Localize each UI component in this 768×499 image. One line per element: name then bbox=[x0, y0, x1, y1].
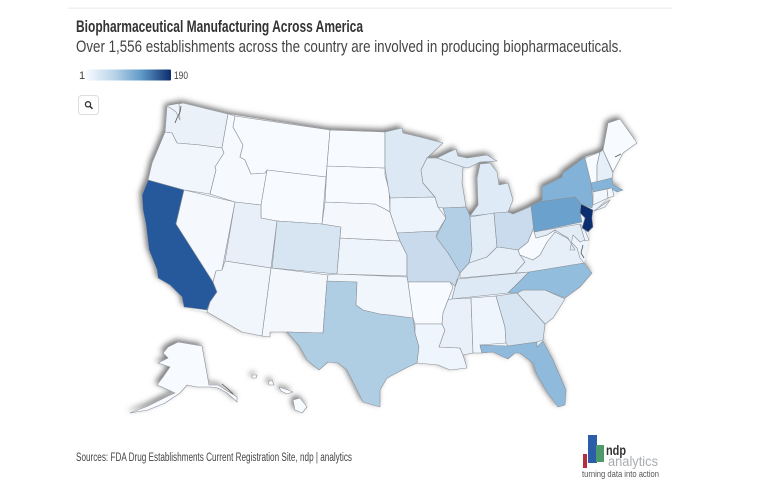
state: Florida bbox=[480, 341, 566, 407]
logo: ndp analytics: ndp bbox=[606, 442, 626, 458]
state: Indiana bbox=[469, 213, 497, 263]
state: Idaho bbox=[210, 114, 267, 205]
choropleth map of US states bbox=[130, 103, 637, 413]
state: Oklahoma bbox=[327, 274, 413, 318]
state: Massachusetts bbox=[591, 178, 623, 192]
state: Arizona bbox=[207, 261, 271, 336]
state: Mississippi bbox=[439, 298, 473, 355]
state: South Carolina bbox=[517, 290, 565, 324]
colour scale legend: 1 bbox=[79, 70, 85, 82]
state: North Carolina bbox=[508, 263, 592, 298]
state: Georgia bbox=[496, 293, 545, 346]
state: California bbox=[142, 180, 217, 310]
colour scale legend bbox=[79, 70, 188, 82]
state: Vermont bbox=[585, 152, 600, 183]
state: Utah bbox=[225, 202, 277, 268]
state: Alaska bbox=[130, 342, 237, 413]
state: Montana bbox=[233, 116, 330, 177]
state: Minnesota bbox=[385, 128, 443, 198]
state: Colorado bbox=[272, 221, 341, 274]
logo: ndp analytics bbox=[582, 435, 659, 480]
logo: ndp analytics: analytics bbox=[608, 453, 658, 469]
state: Oregon bbox=[148, 132, 224, 194]
state: Kansas bbox=[337, 238, 407, 276]
state: Kentucky bbox=[460, 247, 525, 278]
state: West Virginia bbox=[518, 227, 555, 260]
state: Arkansas bbox=[408, 282, 453, 324]
subtitle: Over 1,556 establishments across the country are involved in producing biopharmaceuticals. bbox=[76, 37, 622, 56]
state: Kauai bbox=[252, 375, 257, 378]
state: Wisconsin bbox=[421, 158, 466, 208]
state: Pennsylvania bbox=[531, 197, 582, 232]
source note: Sources: FDA Drug Establishments Current Registration Site, ndp | analytics bbox=[76, 452, 352, 464]
state: Washington bbox=[165, 103, 228, 148]
contiguous US silhouette underlay bbox=[142, 103, 637, 407]
state: South Dakota bbox=[325, 166, 390, 212]
state: Connecticut bbox=[593, 189, 608, 205]
state: Michigan upper peninsula bbox=[437, 149, 497, 168]
state: Maryland bbox=[534, 224, 585, 250]
state: Tennessee bbox=[452, 272, 529, 299]
state: Ohio bbox=[494, 206, 534, 250]
state: Illinois bbox=[436, 207, 472, 273]
state: Maine bbox=[603, 119, 637, 172]
state: Texas bbox=[287, 281, 419, 407]
coastline detail marks bbox=[175, 106, 621, 394]
state: Oahu bbox=[268, 380, 274, 385]
state: Alabama bbox=[471, 296, 506, 353]
state: New Jersey bbox=[580, 204, 593, 232]
state: Virginia bbox=[515, 232, 584, 273]
state: Michigan lower peninsula bbox=[470, 163, 513, 216]
state: Iowa bbox=[390, 197, 446, 233]
state: Nebraska bbox=[322, 202, 400, 241]
state: Missouri bbox=[397, 231, 460, 286]
state: New Hampshire bbox=[597, 150, 613, 182]
state: Rhode Island bbox=[607, 188, 614, 198]
state: Delaware bbox=[580, 224, 589, 241]
state: Hawaii big island bbox=[293, 398, 307, 413]
state: Maui bbox=[279, 387, 293, 394]
colour scale legend: 190 bbox=[174, 70, 188, 82]
title: Biopharmaceutical Manufacturing Across America bbox=[76, 17, 363, 36]
state: North Dakota bbox=[327, 130, 385, 168]
state: Nevada bbox=[176, 190, 235, 282]
state: New York bbox=[531, 157, 593, 208]
state: New Mexico bbox=[262, 268, 328, 337]
logo: ndp analytics: turning data into action bbox=[582, 469, 659, 480]
icon: search button bbox=[78, 96, 98, 114]
state: Long Island bbox=[594, 200, 610, 211]
state: Wyoming bbox=[261, 170, 326, 224]
state: Louisiana bbox=[415, 324, 467, 370]
